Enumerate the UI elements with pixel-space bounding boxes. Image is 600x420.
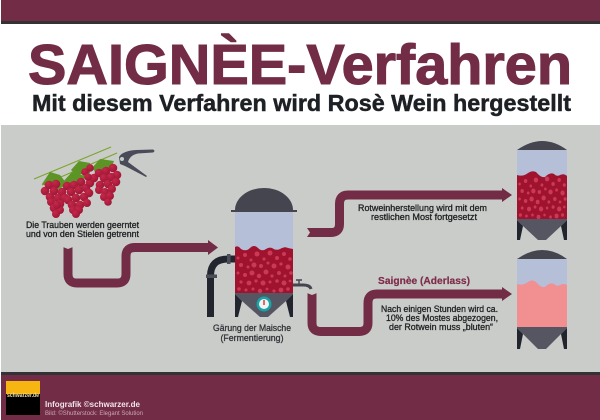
cone bbox=[235, 293, 293, 317]
legs bbox=[235, 294, 293, 317]
tank liquid headspace bbox=[235, 211, 293, 253]
text: harvest: Die Trauben werden geerntet bbox=[26, 220, 139, 230]
inlet pipe bbox=[206, 254, 235, 317]
rosé tank bbox=[517, 250, 567, 349]
logo bbox=[6, 381, 40, 415]
arrow: grapes to fermenter bbox=[63, 240, 218, 283]
gauge bbox=[256, 296, 272, 312]
grey process panel bbox=[1, 125, 600, 372]
text: red wine line 2: restlichen Most fortgesetzt bbox=[371, 212, 477, 222]
fermenter tank bbox=[206, 188, 311, 317]
subtitle: Mit diesem Verfahren wird Rosè Wein hergestellt bbox=[32, 90, 571, 116]
title: SAIGNÈE-Verfahren bbox=[28, 33, 572, 97]
icon: pruning shears bbox=[119, 150, 154, 177]
footer credit: Infografik ©schwarzer.de bbox=[45, 400, 141, 409]
text: bleeding line 3: der Rotwein muss „bluten“ bbox=[389, 322, 493, 332]
bubbles bbox=[236, 250, 293, 293]
image credit: Bild: ©Shutterstock: Elegant Solution bbox=[45, 410, 143, 417]
text: bleeding line 2: 10% des Mostes abgezogen, bbox=[386, 313, 498, 323]
text: fermentation: Gärung der Maische bbox=[213, 323, 291, 333]
text: red wine continued: Rotweinherstellung wird mit dem bbox=[358, 203, 487, 213]
text: fermentation note: (Fermentierung) bbox=[220, 333, 284, 343]
dome rim bbox=[231, 210, 297, 212]
footer band bbox=[1, 372, 600, 420]
leaves bbox=[42, 159, 114, 191]
arrow: to rosé tank bbox=[307, 287, 512, 332]
logo: schwarzer.de bbox=[7, 393, 40, 399]
vine stems bbox=[34, 147, 117, 185]
dome bbox=[235, 188, 293, 210]
red wine tank bbox=[517, 141, 567, 240]
heading: Saignée: Saignèe (Aderlass) bbox=[378, 275, 470, 287]
text: bleeding line 1: Nach einigen Stunden wird ca. bbox=[381, 304, 498, 314]
outlet tap bbox=[293, 280, 311, 289]
red mash bbox=[235, 246, 293, 293]
top banner bbox=[1, 0, 600, 24]
text: stems: und von den Stielen getrennt bbox=[26, 229, 139, 239]
icon: grapes bbox=[34, 147, 121, 218]
grape bunches bbox=[41, 164, 121, 218]
arrow: to red wine tank bbox=[307, 188, 512, 237]
